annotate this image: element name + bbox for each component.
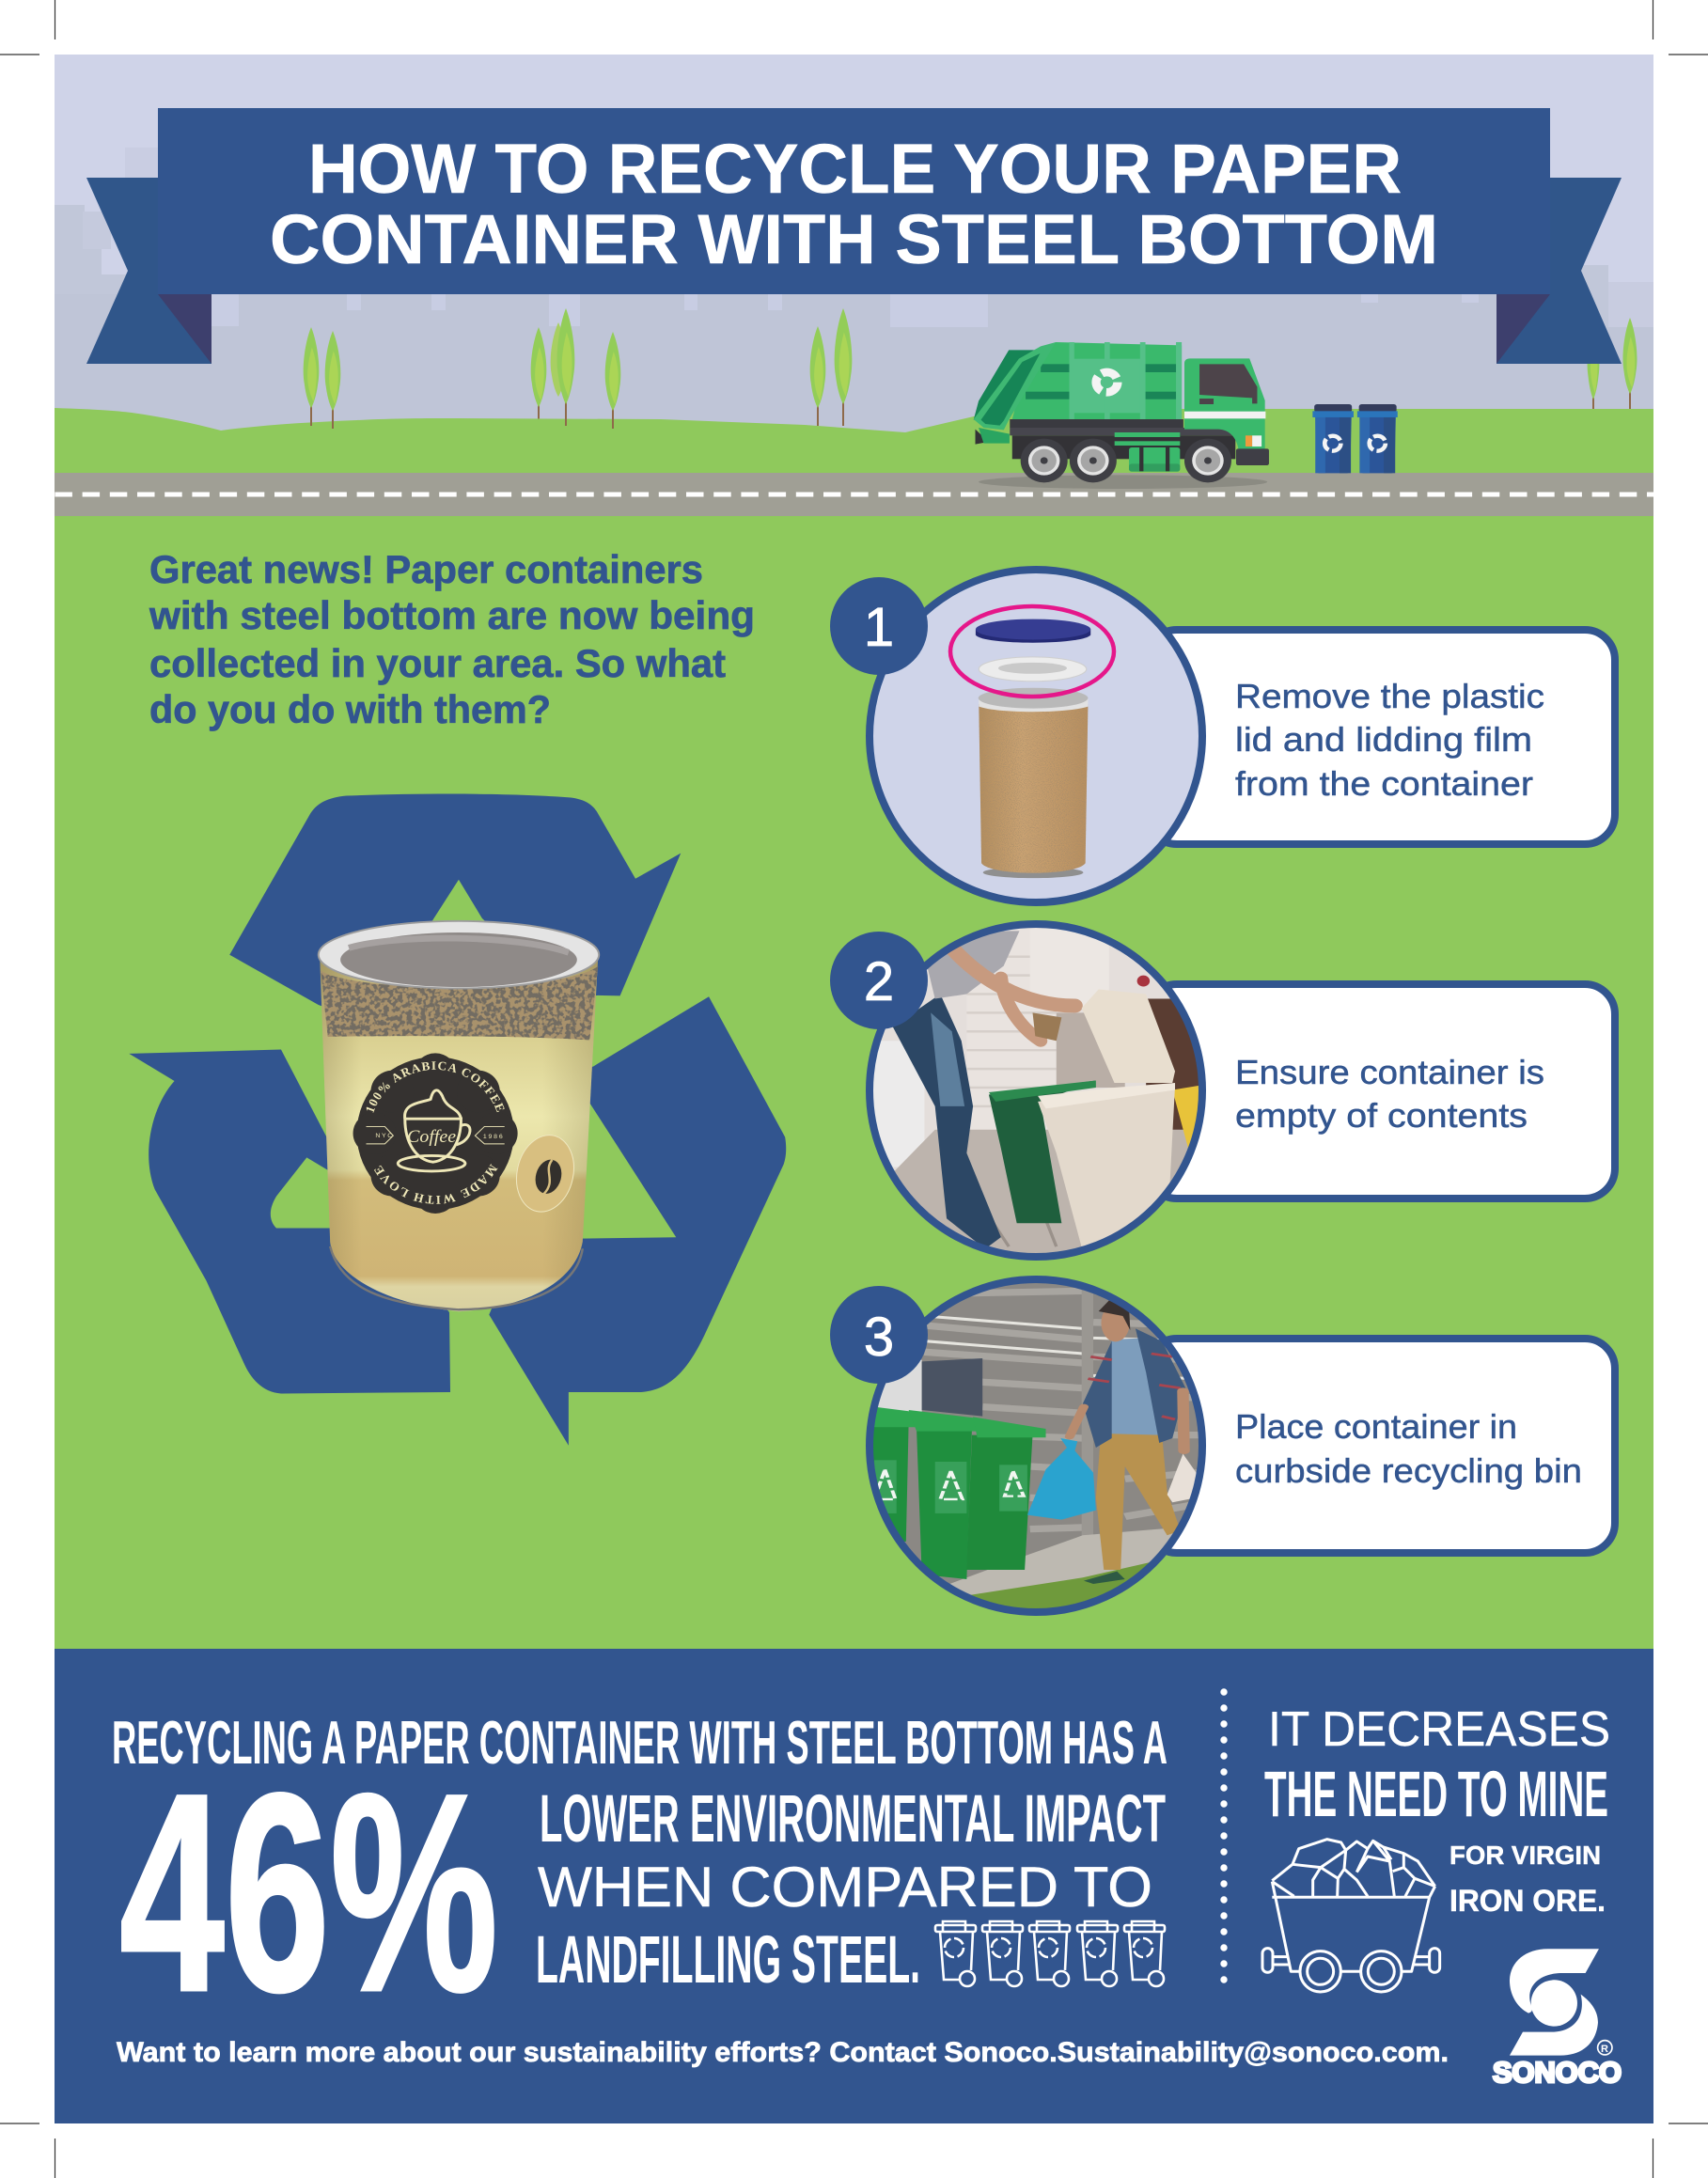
ribbon main	[158, 108, 1550, 294]
step 2 number badge: 2	[864, 951, 894, 1012]
stat text: LOWER ENVIRONMENTAL IMPACT	[540, 1782, 1166, 1857]
trunks over ground	[310, 414, 844, 429]
sky	[55, 55, 1653, 431]
step 3 number badge: 3	[864, 1307, 894, 1368]
step 3 text card	[1147, 1339, 1615, 1553]
step 1 number badge	[830, 577, 928, 675]
step 3 number badge	[830, 1286, 928, 1384]
ribbon right tail	[1496, 178, 1622, 364]
row of recycling bin icons	[935, 1921, 1165, 1986]
intro text: Great news! Paper containers	[149, 547, 703, 591]
recycling arrows	[129, 794, 786, 1446]
step 2	[830, 917, 1615, 1265]
panel: green main background	[55, 516, 1653, 1649]
step 2 text card	[1147, 984, 1615, 1199]
step 3 text: Place container in	[1235, 1407, 1517, 1446]
step 3 text: curbside recycling bin	[1235, 1451, 1582, 1490]
step 1 text	[1235, 677, 1544, 803]
step 3 photo: man carrying bag past green bins	[873, 1283, 1199, 1608]
step 2 number badge	[830, 932, 928, 1029]
step 1 highlight ellipse	[950, 606, 1114, 697]
dotted divider	[1220, 1692, 1228, 1981]
panel: street scene header	[55, 55, 1653, 516]
right column text: IRON ORE.	[1449, 1884, 1606, 1918]
big number 46%: 46%	[119, 1734, 498, 2050]
city skyline	[55, 148, 1653, 445]
coffee can photo	[318, 919, 600, 1312]
Sonoco logo: R	[1601, 2044, 1608, 2055]
step 1 photo: container parts	[873, 573, 1199, 899]
panel: footer statistics	[55, 1649, 1653, 2123]
coffee label badge: 100% ARABICA COFFEE	[367, 1061, 505, 1113]
step 3 ring	[870, 1279, 1202, 1612]
step 3 text	[1235, 1407, 1582, 1490]
title	[270, 130, 1438, 278]
coffee label badge: NYC	[375, 1133, 392, 1139]
step 2 text: Ensure container is	[1235, 1053, 1544, 1091]
road	[55, 473, 1653, 516]
intro text: collected in your area. So what	[149, 641, 726, 685]
blue recycling bins	[1312, 404, 1398, 473]
intro text	[149, 547, 755, 731]
stat text: WHEN COMPARED TO	[538, 1856, 1152, 1919]
ground hills	[55, 408, 1653, 473]
step 2 photo: woman emptying container over bins	[873, 928, 1199, 1253]
coffee label badge: 1986	[483, 1134, 503, 1140]
icon: mine cart with ore	[1262, 1840, 1440, 1992]
Sonoco logo: SONOCO	[1493, 2056, 1622, 2089]
right column text	[1264, 1702, 1610, 1918]
title: CONTAINER WITH STEEL BOTTOM	[270, 200, 1438, 278]
Sonoco logo	[1493, 1949, 1622, 2089]
intro text: with steel bottom are now being	[149, 593, 755, 637]
intro text: do you do with them?	[149, 687, 551, 731]
coffee label badge: Coffee	[407, 1126, 456, 1147]
step 1 text: lid and lidding film	[1235, 720, 1532, 759]
step 2 ring	[870, 924, 1202, 1257]
right column text: IT DECREASES	[1268, 1702, 1610, 1757]
step 1	[830, 564, 1615, 907]
step 3	[830, 1269, 1615, 1622]
ribbon left tail	[86, 178, 212, 364]
stat text	[536, 1782, 1166, 1998]
bean sticker	[509, 1130, 581, 1217]
stat text: LANDFILLING STEEL.	[536, 1923, 920, 1998]
garbage truck	[974, 342, 1269, 489]
title: HOW TO RECYCLE YOUR PAPER	[308, 130, 1402, 208]
step 2 text: empty of contents	[1235, 1096, 1528, 1135]
step 1 text: Remove the plastic	[1235, 677, 1544, 715]
step 1 ring	[870, 570, 1202, 902]
step 1 text card	[1147, 630, 1615, 844]
step 2 text	[1235, 1053, 1544, 1135]
right column text: FOR VIRGIN	[1449, 1841, 1601, 1870]
recycling symbol with container	[130, 793, 786, 1446]
trees	[304, 308, 1637, 429]
step 1 text: from the container	[1235, 764, 1533, 803]
contact line: Want to learn more about our sustainability efforts? Contact Sonoco.Sustainability@sonoco.com.	[117, 2037, 1449, 2068]
coffee label badge: MADE WITH LOVE	[374, 1164, 498, 1204]
coffee label badge	[353, 1053, 518, 1214]
footer background	[55, 1649, 1653, 2123]
step 1 number badge: 1	[864, 597, 894, 658]
title ribbon banner	[86, 108, 1622, 364]
